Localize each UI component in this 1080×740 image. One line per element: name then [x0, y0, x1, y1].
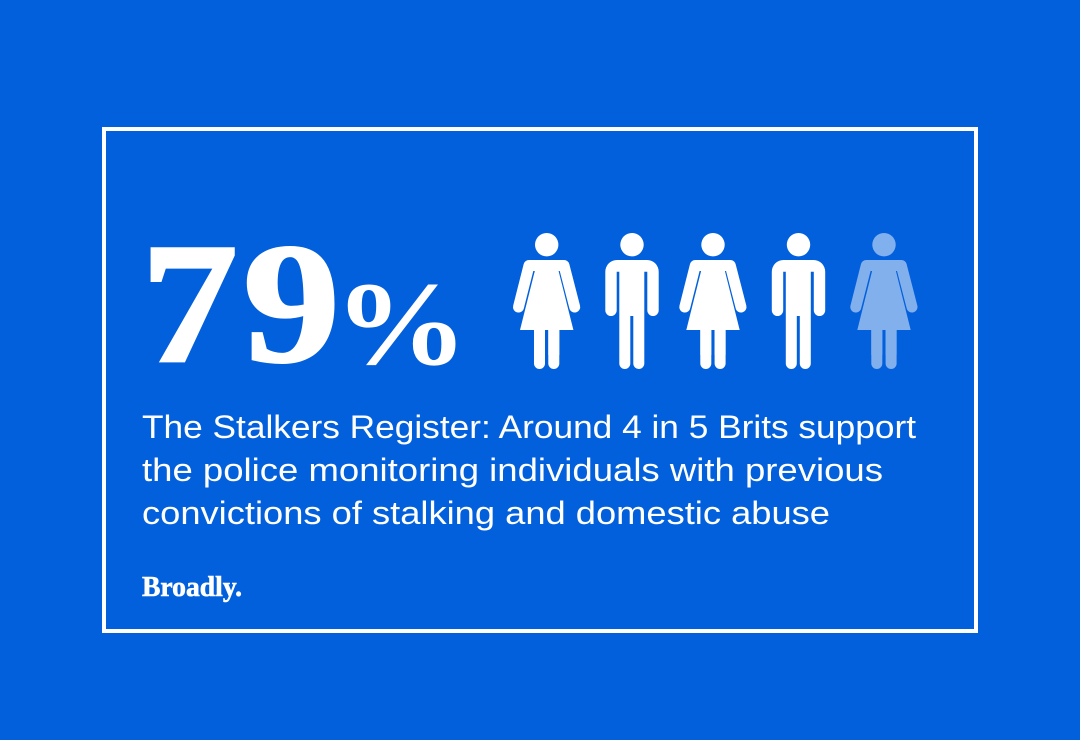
white frame — [104, 129, 976, 631]
big statistic: 79% — [141, 208, 468, 398]
icon: man 2 — [772, 233, 825, 369]
icon: man 1 — [605, 233, 659, 369]
digit 9: 9 — [243, 208, 340, 398]
description text — [142, 409, 916, 531]
Broadly logo wordmark: Broadly. — [142, 572, 242, 603]
line 2: the police monitoring individuals with previous — [142, 452, 883, 488]
icon: woman 2 — [685, 233, 741, 369]
line 3: convictions of stalking and domestic abuse — [142, 495, 830, 531]
icon: woman 3, faded — [856, 233, 912, 369]
digit 7: 7 — [141, 208, 238, 398]
icon row: five people, four solid and one faded — [518, 233, 912, 369]
line 1: The Stalkers Register: Around 4 in 5 Brits support — [142, 409, 916, 445]
icon: woman 1 — [518, 233, 575, 369]
percent sign: % — [334, 259, 468, 391]
